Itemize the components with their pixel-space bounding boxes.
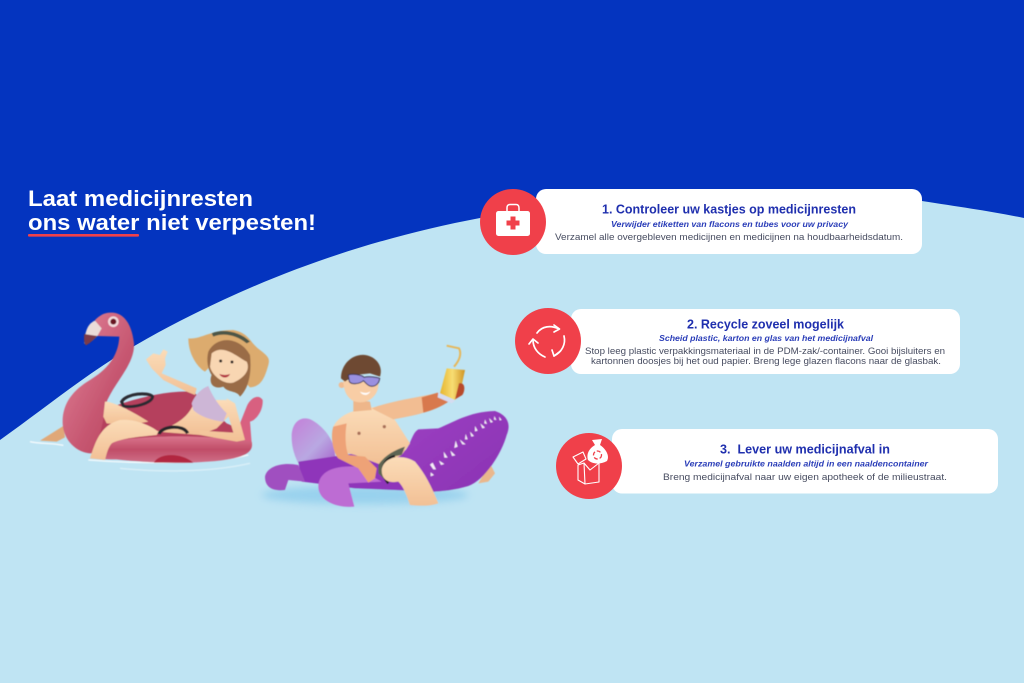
back thigh bbox=[103, 402, 148, 425]
flamingo beak bbox=[84, 321, 102, 344]
shorts band bbox=[383, 456, 395, 483]
front leg bbox=[382, 457, 438, 506]
background: light blue water wave bbox=[0, 191, 1024, 683]
left arm bbox=[332, 423, 377, 483]
step 1 body: Verzamel alle overgebleven medicijnen en medicijnen na houdbaarheidsdatum. bbox=[555, 231, 903, 242]
torso bbox=[157, 400, 228, 435]
drink can bbox=[440, 368, 465, 400]
hat band bbox=[212, 331, 250, 343]
title: Laat medicijnresten bbox=[28, 186, 253, 211]
bikini top bbox=[192, 386, 227, 422]
step 3 subtitle: Verzamel gebruikte naalden altijd in een naaldencontainer bbox=[684, 458, 929, 468]
wristband bbox=[438, 393, 455, 403]
sunglasses bbox=[348, 374, 380, 386]
hand bbox=[455, 383, 464, 399]
title: ons water niet verpesten! bbox=[28, 210, 316, 235]
step 1 subtitle: Verwijder etiketten van flacons en tubes voor uw privacy bbox=[611, 219, 849, 229]
crocodile head bbox=[403, 411, 509, 492]
step 3 body: Breng medicijnafval naar uw eigen apotheek of de milieustraat. bbox=[663, 471, 947, 482]
raised arm bbox=[146, 349, 197, 395]
illustration: man on purple crocodile float bbox=[262, 346, 509, 507]
crocodile tail bbox=[292, 418, 338, 467]
ear bbox=[339, 382, 345, 388]
crocodile front leg bbox=[318, 466, 382, 507]
water ripples bbox=[30, 442, 250, 471]
step 2 subtitle: Scheid plastic, karton en glas van het medicijnafval bbox=[659, 333, 874, 343]
hair bbox=[341, 355, 381, 382]
hair bbox=[207, 340, 251, 397]
face features bbox=[219, 359, 233, 377]
nipples bbox=[357, 425, 386, 435]
ring front bbox=[92, 436, 252, 463]
panel: step 2 bbox=[515, 308, 960, 374]
panel: step 1 bbox=[480, 189, 922, 255]
ring back bbox=[93, 391, 250, 450]
step 2 body: Stop leeg plastic verpakkingsmateriaal in de PDM-zak/-container. Gooi bijsluiters en bbox=[585, 345, 945, 356]
handle front bbox=[159, 427, 188, 434]
step 2 body: kartonnen doosjes bij het oud papier. Breng lege glazen flacons naar de glasbak. bbox=[591, 355, 941, 366]
ring valve bbox=[154, 455, 193, 463]
crocodile back foot bbox=[265, 464, 305, 490]
step 3 heading: 3. Lever uw medicijnafval in bbox=[720, 442, 890, 456]
raised arm bbox=[372, 393, 450, 419]
right arm bbox=[200, 398, 245, 442]
face bbox=[210, 350, 248, 383]
icon circle: medicine waste box and bag bbox=[556, 433, 622, 499]
torso bbox=[333, 407, 410, 465]
step 2 heading: 2. Recycle zoveel mogelijk bbox=[687, 316, 845, 332]
step 1 heading: 1. Controleer uw kastjes op medicijnresten bbox=[602, 202, 856, 216]
card 3 bbox=[612, 429, 998, 494]
crocodile back foot skin bbox=[478, 463, 495, 483]
flamingo eye bbox=[108, 316, 119, 327]
back leg bbox=[40, 426, 65, 442]
swan tail at rear of ring bbox=[233, 397, 263, 443]
step 2 body bbox=[585, 345, 945, 366]
illustration: woman on flamingo float bbox=[30, 313, 269, 471]
mouth bbox=[360, 391, 370, 395]
panel: step 3 bbox=[556, 429, 998, 499]
drink straw bbox=[447, 346, 460, 367]
handle back bbox=[122, 394, 153, 407]
icon circle: first aid kit bbox=[480, 189, 546, 255]
flamingo body and neck bbox=[63, 313, 134, 453]
front leg bbox=[90, 420, 158, 460]
icon circle: recycle arrows bbox=[515, 308, 581, 374]
card 2 bbox=[571, 309, 960, 374]
crocodile body underlay bbox=[298, 450, 435, 492]
title bbox=[28, 186, 316, 237]
crocodile teeth bbox=[430, 416, 502, 476]
head bbox=[343, 380, 378, 402]
card 1 bbox=[536, 189, 922, 254]
water shadow bbox=[262, 486, 468, 504]
hat brim bbox=[188, 330, 269, 387]
swim shorts bbox=[378, 447, 405, 483]
title underline bbox=[28, 234, 139, 237]
neck bbox=[353, 400, 372, 412]
